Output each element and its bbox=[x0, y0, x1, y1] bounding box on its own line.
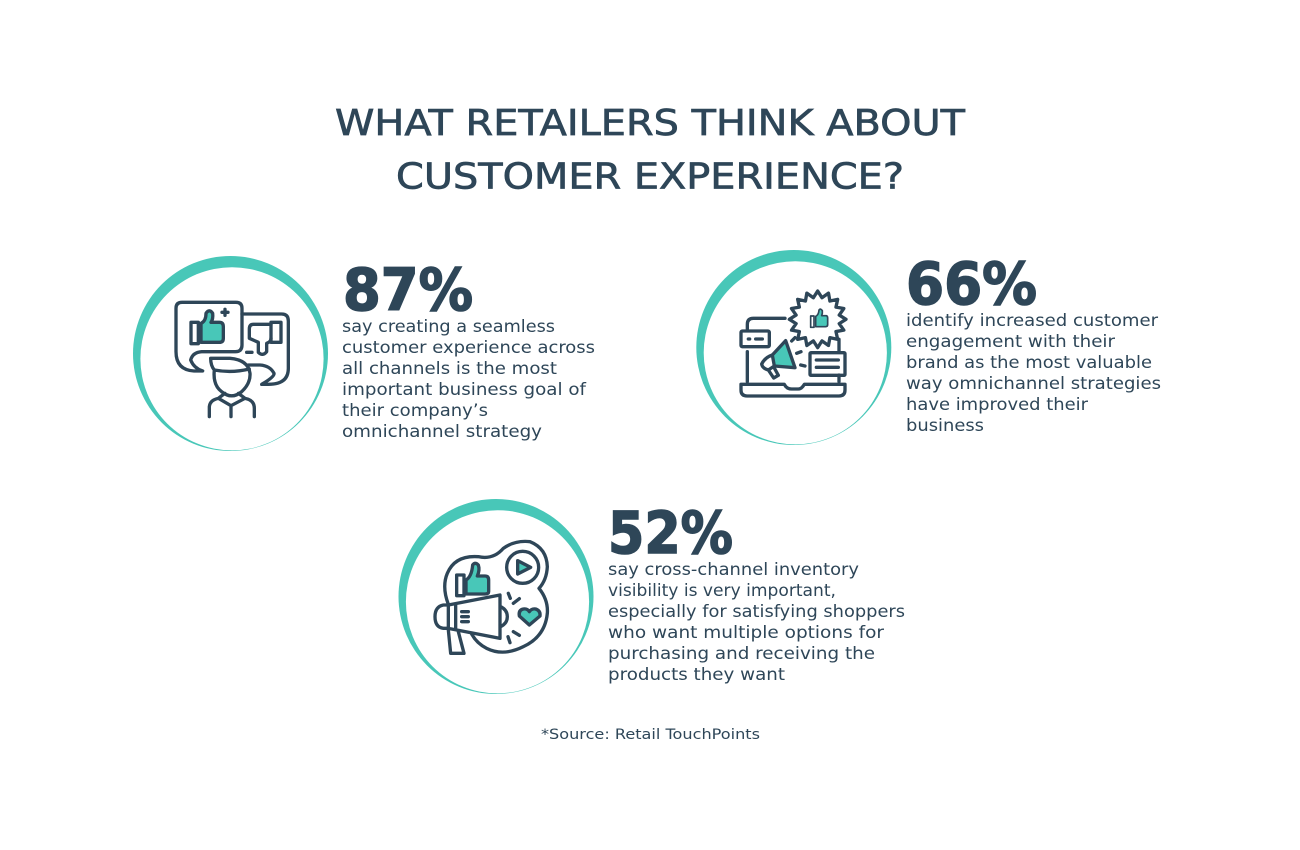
panel: 52% stat bbox=[398, 499, 905, 694]
description: 52%: purchasing and receiving the bbox=[608, 644, 875, 664]
stat: 66%: 66% bbox=[906, 250, 1037, 318]
description: 66%: identify increased customer bbox=[906, 311, 1158, 331]
description: 87%: customer experience across bbox=[342, 338, 595, 358]
description: 87%: omnichannel strategy bbox=[342, 422, 542, 442]
description: 52%: especially for satisfying shoppers bbox=[608, 602, 905, 622]
icon: person weighing thumbs up and down bbox=[176, 302, 288, 417]
stat: 87%: 87% bbox=[343, 256, 473, 324]
description: 52%: products they want bbox=[608, 665, 785, 685]
description: 52%: visibility is very important, bbox=[608, 581, 836, 601]
description: 87% bbox=[342, 317, 595, 442]
ring: 66% bbox=[696, 250, 891, 445]
ring: 87% bbox=[133, 256, 328, 451]
description: 66%: brand as the most valuable bbox=[906, 353, 1152, 373]
description: 87%: important business goal of bbox=[342, 380, 587, 400]
description: 52%: say cross-channel inventory bbox=[608, 560, 859, 580]
description: 87%: all channels is the most bbox=[342, 359, 557, 379]
description: 66%: business bbox=[906, 416, 984, 436]
description: 87%: say creating a seamless bbox=[342, 317, 555, 337]
icon: megaphone with like, play and heart bbox=[435, 541, 547, 653]
description: 52% bbox=[608, 560, 905, 685]
description: 52%: who want multiple options for bbox=[608, 623, 884, 643]
title bbox=[335, 103, 966, 198]
icon: laptop with megaphone and thumbs-up badge bbox=[741, 291, 846, 396]
panel: 87% stat bbox=[133, 256, 595, 451]
description: 66%: engagement with their bbox=[906, 332, 1115, 352]
title: CUSTOMER EXPERIENCE? bbox=[396, 156, 904, 198]
description: 87%: their company’s bbox=[342, 401, 488, 421]
source note: *Source: Retail TouchPoints bbox=[541, 727, 760, 743]
title: WHAT RETAILERS THINK ABOUT bbox=[335, 103, 966, 144]
ring: 52% bbox=[398, 499, 594, 694]
description: 66%: way omnichannel strategies bbox=[906, 374, 1161, 394]
stat: 52%: 52% bbox=[608, 499, 733, 567]
description: 66%: have improved their bbox=[906, 395, 1088, 415]
description: 66% bbox=[906, 311, 1161, 436]
panel: 66% stat bbox=[696, 250, 1161, 445]
